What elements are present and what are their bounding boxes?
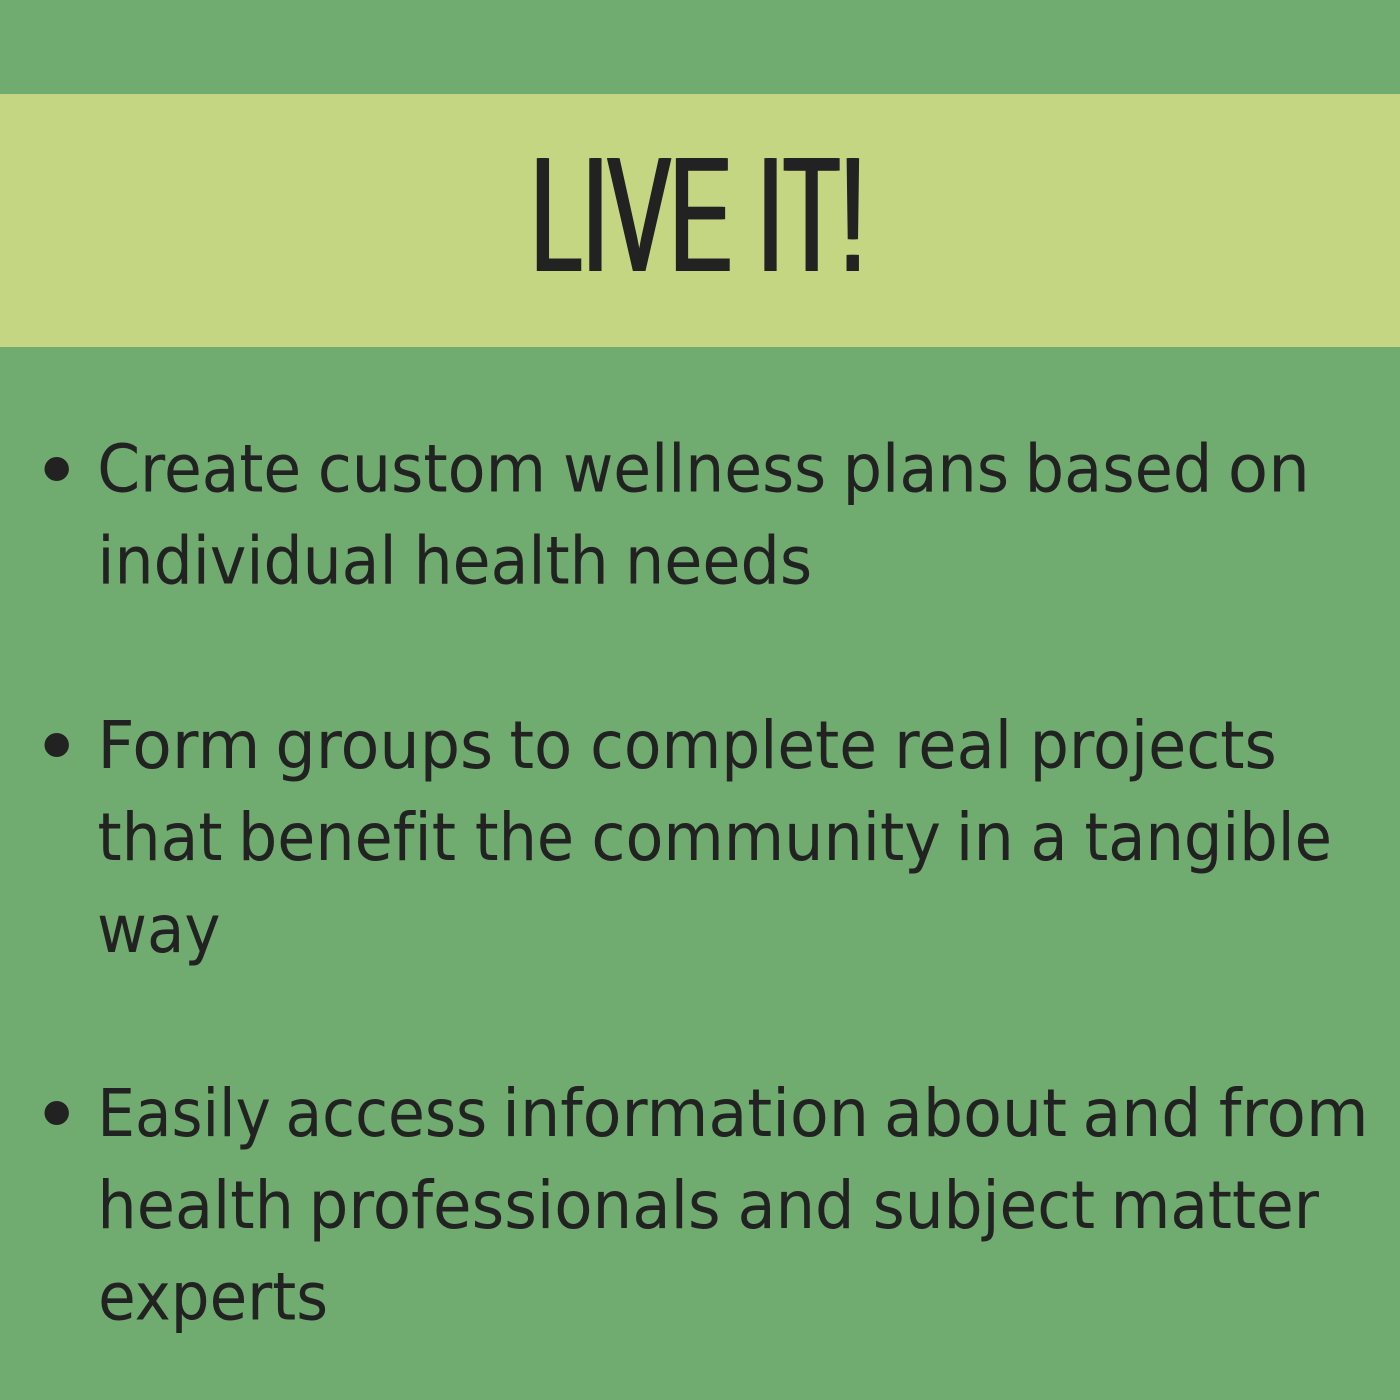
title banner: [0, 94, 1400, 347]
bullet text: to: [510, 707, 572, 784]
bullet text: community: [591, 799, 941, 876]
bullet text: health: [97, 1167, 294, 1244]
bullet text: that: [98, 799, 222, 876]
bullet text: information: [502, 1075, 869, 1152]
bullet text: from: [1219, 1075, 1369, 1152]
bullet item: group projects: [44, 707, 1332, 968]
bullet dot: [44, 457, 69, 481]
bullet text: Create: [97, 431, 301, 508]
bullet text: way: [97, 891, 220, 968]
bullet text: tangible: [1084, 799, 1332, 876]
bullet text: on: [1228, 431, 1310, 508]
bullet text: and: [1082, 1075, 1201, 1152]
bullet text: a: [1030, 799, 1068, 876]
bullet text: benefit: [238, 799, 456, 876]
bullet text: wellness: [563, 431, 826, 508]
bullet text: [97, 431, 1310, 600]
bullet item: wellness plans: [44, 431, 1310, 600]
bullet text: Easily: [97, 1075, 271, 1152]
bullet text: individual: [97, 523, 397, 600]
bullet text: [97, 1075, 1369, 1336]
title: LIVE IT!: [531, 123, 866, 306]
bullet text: in: [956, 799, 1014, 876]
bullet text: groups: [275, 707, 493, 784]
bullet text: the: [475, 799, 574, 876]
bullet text: matter: [1111, 1167, 1320, 1244]
bullet text: access: [286, 1075, 487, 1152]
bullet text: about: [884, 1075, 1067, 1152]
bullet text: health: [414, 523, 609, 600]
bullet text: plans: [843, 431, 1009, 508]
bullet text: needs: [625, 523, 812, 600]
bullet item: health information: [44, 1075, 1369, 1336]
bullet text: projects: [1030, 707, 1277, 784]
bullet text: Form: [97, 707, 260, 784]
bullet dot: [44, 733, 69, 757]
bullet text: [97, 707, 1332, 968]
bullet text: complete: [590, 707, 877, 784]
bullet text: professionals: [309, 1167, 721, 1244]
bullet text: real: [894, 707, 1012, 784]
bullet text: based: [1025, 431, 1212, 508]
bullet text: subject: [873, 1167, 1095, 1244]
bullet dot: [44, 1101, 69, 1125]
bullet text: experts: [98, 1259, 328, 1336]
bullet text: custom: [318, 431, 546, 508]
bullet text: and: [738, 1167, 854, 1244]
